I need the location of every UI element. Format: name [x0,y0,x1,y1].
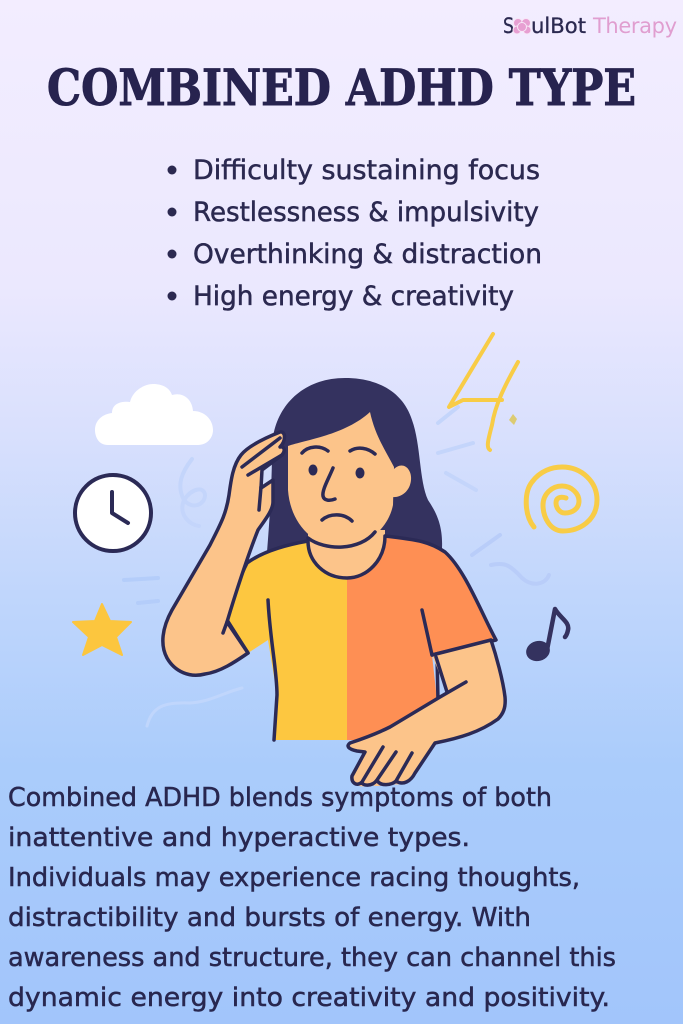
icon: brain logo [513,18,531,34]
eyes [308,464,364,478]
chin line [308,532,375,547]
bullet list: Restlessness & impulsivity [193,197,539,228]
description paragraph: Combined ADHD blends symptoms of both [8,783,552,813]
raised arm and hand [163,432,284,675]
eyebrows [302,447,375,454]
bullet list: Difficulty sustaining focus [193,155,540,186]
logo: SoulBot Therapy [503,14,677,38]
icon: clock [75,475,151,551]
icon: scribbled number 4 [449,334,518,450]
mouth [322,515,352,521]
icon: cloud [95,384,213,445]
logo: SoulBot Therapy: Therapy [592,14,677,38]
description paragraph: distractibility and bursts of energy. With [8,903,531,933]
faint motion squiggles [124,407,549,726]
shirt: orange half [347,536,496,740]
description paragraph: inattentive and hyperactive types. [8,823,470,853]
neck [308,530,385,578]
shirt: yellow half [227,541,347,740]
icon: star [73,604,131,655]
description paragraph [8,783,616,1013]
bullet list [168,155,542,312]
bullet list: Overthinking & distraction [193,239,542,270]
description paragraph: awareness and structure, they can channel this [8,943,616,973]
nose [323,468,335,500]
description paragraph: dynamic energy into creativity and positivity. [8,983,610,1013]
lowered arm and hand [348,640,505,786]
face [288,412,394,547]
logo: SoulBot Therapy: ulBot [531,14,586,38]
icon: spiral [526,467,597,531]
shirt outlines [227,536,496,740]
description paragraph: Individuals may experience racing thoughts, [8,863,580,893]
illustration: woman with hand on head [163,378,505,786]
finger lines [223,438,282,633]
arm outlines [348,640,505,785]
logo: SoulBot Therapy: S [503,14,514,38]
icon: music note [524,609,568,664]
hair [267,378,442,560]
bullet list: High energy & creativity [193,281,514,312]
ear [392,465,411,497]
